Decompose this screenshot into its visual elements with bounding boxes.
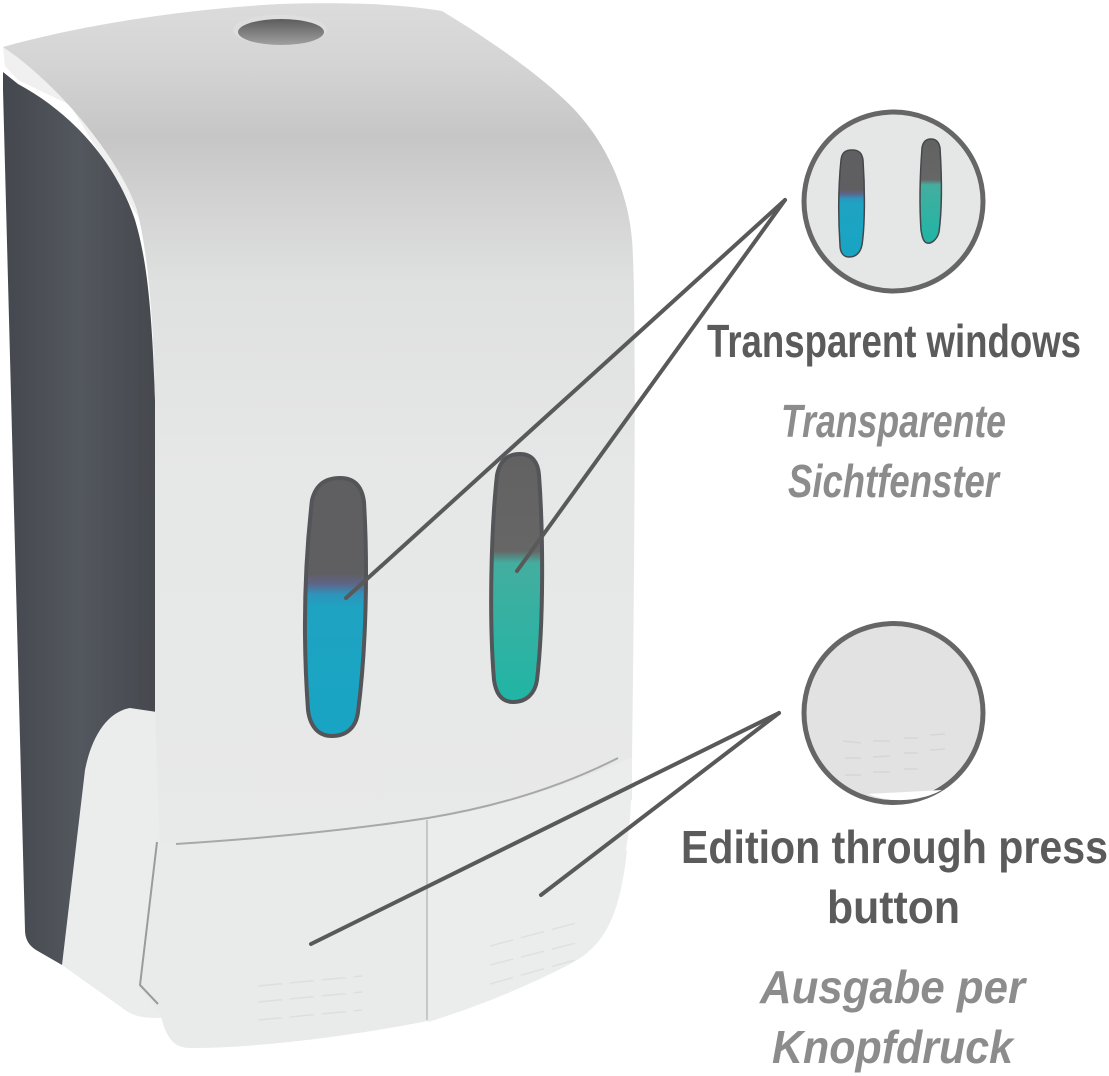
zoom circle: button <box>804 624 983 802</box>
subheading: ausgabe per knopfdruck <box>759 961 1027 1073</box>
embossed marks right <box>490 922 580 984</box>
side gap line <box>140 842 158 1004</box>
subheading: ausgabe per knopfdruck: Knopfdruck <box>772 1021 1015 1073</box>
mini window blue <box>839 150 864 257</box>
heading: edition through press button <box>681 821 1108 933</box>
subheading: transparente sichtfenster <box>781 395 1006 507</box>
heading: edition through press button: button <box>827 881 960 933</box>
seam under main cover <box>176 758 618 844</box>
subheading: transparente sichtfenster: Transparente <box>781 395 1006 447</box>
lid highlight strip <box>3 47 175 340</box>
right window <box>491 454 542 702</box>
main front cover <box>3 3 635 850</box>
subheading: transparente sichtfenster: Sichtfenster <box>788 455 1001 507</box>
callout leader lines: windows <box>346 200 785 598</box>
white lower side cover <box>62 708 170 1018</box>
callout leader lines: button <box>311 713 779 944</box>
left window <box>305 478 366 736</box>
mini window teal <box>920 139 941 243</box>
right button <box>428 757 632 1022</box>
push buttons <box>140 757 632 1048</box>
top hole <box>233 15 327 45</box>
subheading: ausgabe per knopfdruck: Ausgabe per <box>759 961 1027 1013</box>
embossed marks left <box>258 976 362 1020</box>
left button <box>140 819 428 1048</box>
divider between buttons <box>426 820 428 1020</box>
dark side panel <box>3 72 158 965</box>
zoom circle: windows <box>804 112 983 291</box>
dispenser product <box>3 3 635 1048</box>
